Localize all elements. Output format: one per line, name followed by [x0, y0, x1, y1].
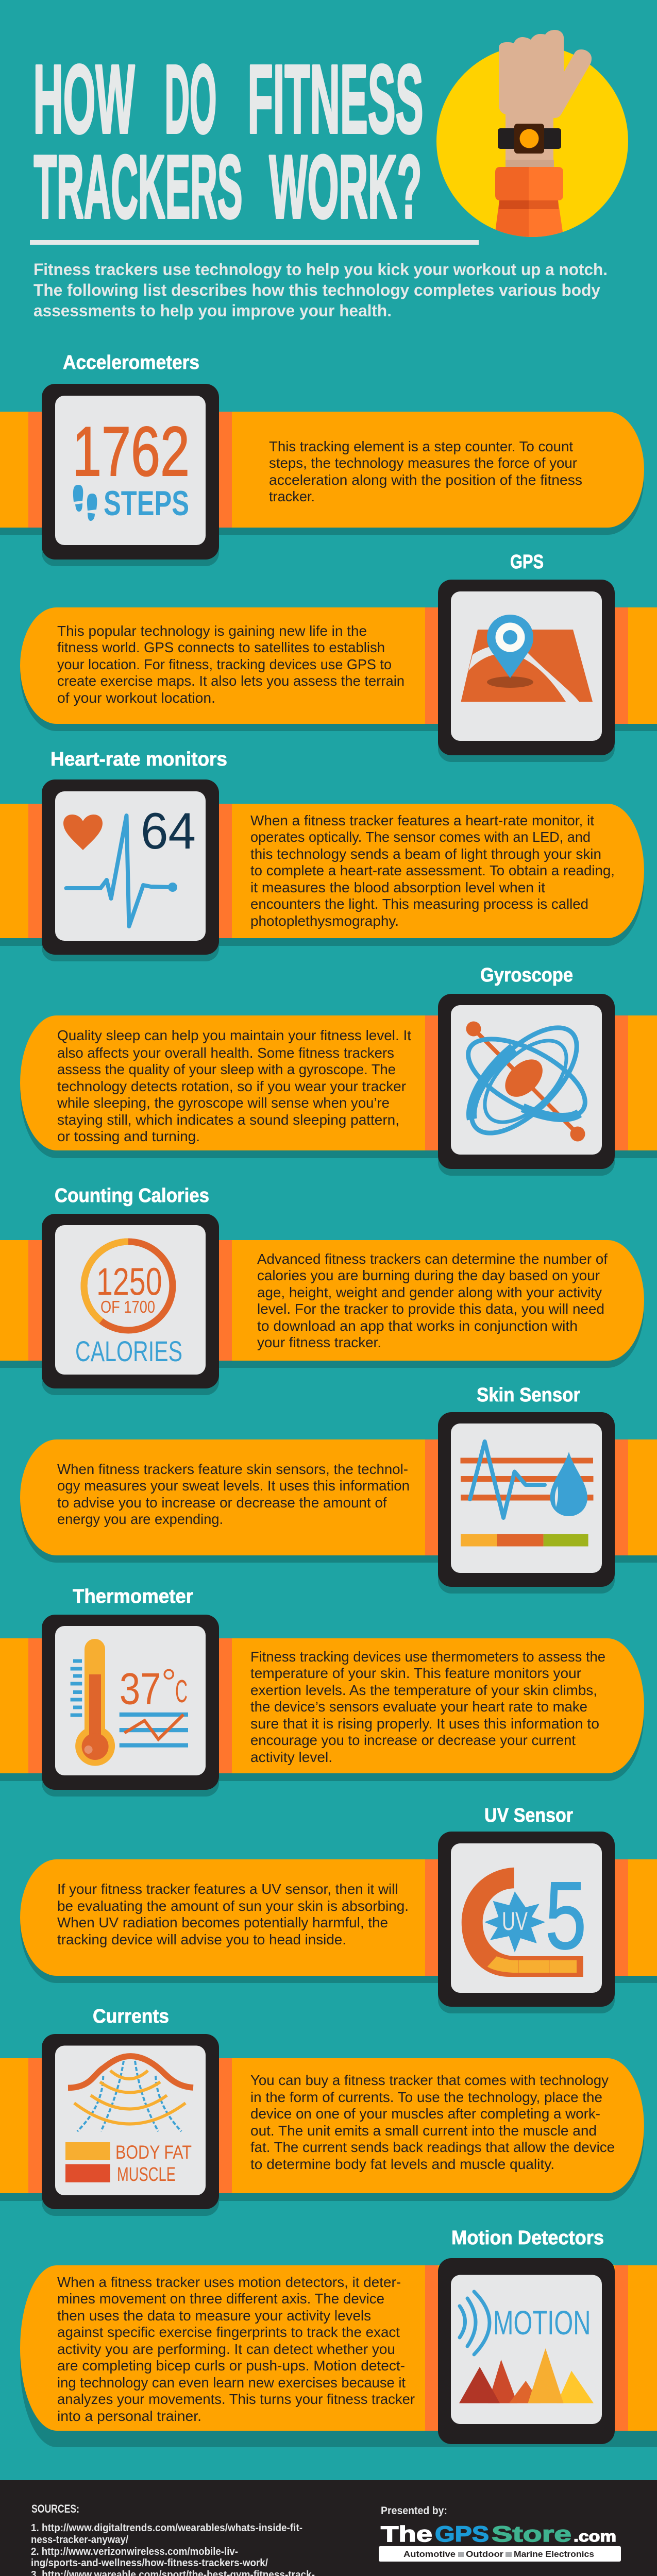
description: energy you are expending.: [57, 1511, 223, 1527]
title: TRACKERS: [34, 136, 242, 237]
description: When fitness trackers feature skin sensors, the technol-: [57, 1461, 408, 1477]
panel: gyroscope: [20, 964, 657, 1176]
description: Fitness tracking devices use thermometers to assess the: [250, 1649, 605, 1665]
description: acceleration along with the position of the fitness: [269, 472, 582, 488]
heading: accelerometers: Accelerometers: [63, 352, 199, 374]
sources: 2. http://www.verizonwireless.com/mobile-liv-: [31, 2546, 238, 2557]
description: temperature of your skin. This feature monitors your: [250, 1665, 581, 1681]
description: Quality sleep can help you maintain your fitness level. It: [57, 1027, 411, 1043]
description: age, height, weight and gender along with your activity: [257, 1284, 602, 1300]
tracker watch with calorie display: OF 1700: [100, 1297, 155, 1316]
title: DO: [165, 45, 216, 154]
tracker watch with thermometer display: C: [175, 1674, 188, 1709]
divider bar: [30, 240, 479, 245]
presented by logo: Store: [492, 2522, 571, 2547]
description: also affects your overall health. Some fitness trackers: [57, 1045, 394, 1061]
tracker band: [20, 1439, 657, 1563]
description: this technology sends a beam of light through your skin: [250, 846, 601, 862]
description: staying still, which indicates a sound sleeping pattern,: [57, 1112, 399, 1128]
description: calories you are burning during the day based on your: [257, 1267, 600, 1283]
tracker watch with body composition display: BODY FAT: [115, 2142, 192, 2163]
tracker watch with heart-rate display: 64: [141, 802, 196, 859]
tracker watch with motion display: MOTION: [493, 2303, 591, 2342]
tracker watch with body composition display: [42, 2034, 219, 2216]
description: mines movement on three different axis. The device: [57, 2291, 384, 2307]
description: fat. The current sends back readings that allow the device: [250, 2139, 615, 2155]
tracker watch with thermometer display: [42, 1615, 219, 1797]
text: WORK?: [269, 136, 422, 237]
sources: ness-tracker-anyway/: [31, 2534, 128, 2546]
description: to complete a heart-rate assessment. To obtain a reading,: [250, 862, 615, 878]
description: tracking device will advise you to head inside.: [57, 1931, 346, 1947]
description: When a fitness tracker features a heart-rate monitor, it: [250, 812, 594, 828]
illustration: hand wearing fitness tracker: [436, 30, 628, 242]
description: the device’s sensors evaluate your heart rate to make: [250, 1699, 587, 1715]
presented by logo: Marine Electronics: [514, 2549, 594, 2559]
presented by logo: Outdoor: [466, 2549, 503, 2559]
presented by logo: Presented by:: [381, 2505, 447, 2517]
panel: footer: [0, 2480, 657, 2576]
heading: gps: GPS: [510, 551, 544, 573]
heading: heart-rate monitors: Heart-rate monitors: [50, 749, 227, 770]
description: out. The unit emits a small current into the muscle and: [250, 2123, 597, 2139]
description: device on one of your muscles after completing a work-: [250, 2106, 600, 2122]
panel: thermometer: [0, 1586, 644, 1797]
description: while sleeping, the gyroscope will sense when you’re: [57, 1095, 390, 1111]
description: [250, 1649, 605, 1765]
intro text: assessments to help you improve your health.: [33, 301, 392, 320]
description: When a fitness tracker uses motion detectors, it deter-: [57, 2274, 401, 2290]
presented by logo: GPS: [435, 2522, 489, 2547]
tracker band: [20, 1859, 657, 1983]
tracker band: [20, 607, 657, 731]
sources: SOURCES:: [31, 2502, 79, 2515]
description: You can buy a fitness tracker that comes with technology: [250, 2072, 609, 2088]
description: [250, 812, 615, 929]
heading: gyroscope: Gyroscope: [480, 964, 573, 986]
heading: currents: Currents: [93, 2006, 169, 2027]
description: technology detects rotation, so if you wear your tracker: [57, 1078, 406, 1094]
description: then uses the data to measure your activity levels: [57, 2308, 371, 2324]
description: [250, 2072, 615, 2172]
description: to advise you to increase or decrease the amount of: [57, 1495, 387, 1511]
description: This popular technology is gaining new life in the: [57, 623, 367, 639]
description: against specific exercise fingerprints to track the exact: [57, 2324, 400, 2340]
description: [257, 1251, 608, 1350]
description: [57, 1881, 409, 1947]
intro text: The following list describes how this technology completes various body: [33, 281, 600, 299]
tracker watch with gyroscope display: [438, 994, 615, 1176]
panel: skin sensor: [20, 1384, 657, 1594]
panel: gps: [20, 551, 657, 762]
tracker watch with steps display: STEPS: [104, 484, 189, 523]
tracker watch with skin sensor display: [438, 1412, 615, 1594]
presented by logo: The: [381, 2522, 432, 2547]
description: to determine body fat levels and muscle quality.: [250, 2156, 554, 2172]
tracker watch with uv display: 5: [545, 1862, 586, 1969]
description: exertion levels. As the temperature of your skin climbs,: [250, 1682, 597, 1698]
tracker band: [20, 2265, 657, 2447]
panel: heart-rate monitors: [0, 749, 644, 961]
description: encounters the light. This measuring process is called: [250, 896, 588, 912]
description: [57, 2274, 415, 2424]
description: photoplethysmography.: [250, 913, 399, 929]
description: activity level.: [250, 1749, 332, 1765]
heading: counting calories: Counting Calories: [55, 1185, 209, 1207]
description: encourage you to increase or decrease your current: [250, 1732, 576, 1748]
description: of your workout location.: [57, 690, 215, 706]
text: FITNESS: [247, 45, 424, 154]
intro text: Fitness trackers use technology to help you kick your workout up a notch.: [33, 260, 608, 279]
panel: currents: [0, 2006, 644, 2216]
description: ing technology can even learn new exercises because it: [57, 2375, 406, 2391]
tracker watch with calorie display: 1250: [96, 1260, 162, 1303]
tracker band: [0, 804, 644, 946]
heading: motion detectors: Motion Detectors: [451, 2227, 604, 2249]
panel: counting calories: [0, 1185, 644, 1395]
tracker watch with uv display: UV: [502, 1907, 528, 1936]
description: ogy measures your sweat levels. It uses this information: [57, 1478, 410, 1494]
tracker watch with steps display: [42, 384, 219, 566]
tracker watch with uv display: [438, 1832, 615, 2013]
title: HOW: [33, 45, 135, 154]
description: tracker.: [269, 488, 315, 504]
description: assess the quality of your sleep with a gyroscope. The: [57, 1061, 396, 1077]
tracker watch with steps display: 1762: [72, 412, 190, 490]
description: This tracking element is a step counter. To count: [269, 438, 573, 454]
description: [57, 1027, 411, 1144]
description: level. For the tracker to provide this data, you will need: [257, 1301, 604, 1317]
title: [33, 45, 424, 237]
heading: uv sensor: UV Sensor: [484, 1805, 573, 1826]
tracker band: [0, 412, 644, 535]
description: to download an app that works in conjunction with: [257, 1318, 578, 1334]
tracker watch with calorie display: [42, 1214, 219, 1395]
sources: ing/sports-and-wellness/how-fitness-trackers-work/: [31, 2557, 268, 2569]
tracker watch with heart-rate display: [42, 779, 219, 961]
sources: [31, 2502, 315, 2576]
heading: skin sensor: Skin Sensor: [477, 1384, 580, 1406]
description: [57, 623, 405, 706]
description: are completing bicep curls or push-ups. Motion detect-: [57, 2358, 405, 2374]
panel: motion detectors: [20, 2227, 657, 2447]
description: steps, the technology measures the force of your: [269, 455, 577, 471]
description: activity you are performing. It can detect whether you: [57, 2341, 395, 2357]
description: If your fitness tracker features a UV sensor, then it will: [57, 1881, 398, 1897]
presented by logo: .com: [574, 2528, 616, 2545]
presented by logo: [379, 2505, 621, 2562]
tracker watch with thermometer display: 37: [120, 1664, 161, 1714]
description: fitness world. GPS connects to satellites to establish: [57, 639, 385, 655]
panel: accelerometers: [0, 352, 644, 566]
sources: 1. http://www.digitaltrends.com/wearables/whats-inside-fit-: [31, 2522, 302, 2534]
description: your fitness tracker.: [257, 1334, 381, 1350]
description: When UV radiation becomes potentially harmful, the: [57, 1914, 388, 1930]
description: Advanced fitness trackers can determine the number of: [257, 1251, 608, 1267]
tracker band: [0, 2058, 644, 2201]
tracker watch with body composition display: MUSCLE: [117, 2164, 176, 2185]
description: create exercise maps. It also lets you assess the terrain: [57, 673, 405, 689]
panel: uv sensor: [20, 1805, 657, 2013]
description: your location. For fitness, tracking devices use GPS to: [57, 656, 392, 672]
description: it measures the blood absorption level when it: [250, 879, 545, 895]
tracker watch with motion display: [438, 2258, 615, 2444]
intro text: [33, 260, 608, 320]
description: analyzes your movements. This turns your fitness tracker: [57, 2391, 415, 2407]
description: be evaluating the amount of sun your skin is absorbing.: [57, 1898, 409, 1914]
tracker watch with map display: [438, 580, 615, 762]
description: or tossing and turning.: [57, 1128, 200, 1144]
tracker band: [20, 1015, 657, 1158]
tracker band: [0, 1638, 644, 1781]
description: sure that it is rising properly. It uses this information to: [250, 1716, 599, 1732]
description: into a personal trainer.: [57, 2408, 201, 2424]
heading: thermometer: Thermometer: [73, 1586, 193, 1607]
description: in the form of currents. To use the technology, place the: [250, 2089, 602, 2105]
description: operates optically. The sensor comes with an LED, and: [250, 829, 591, 845]
tracker watch with calorie display: CALORIES: [75, 1335, 182, 1367]
tracker band: [0, 1240, 644, 1368]
description: [57, 1461, 410, 1527]
presented by logo: Automotive: [403, 2549, 456, 2559]
description: [269, 438, 582, 504]
